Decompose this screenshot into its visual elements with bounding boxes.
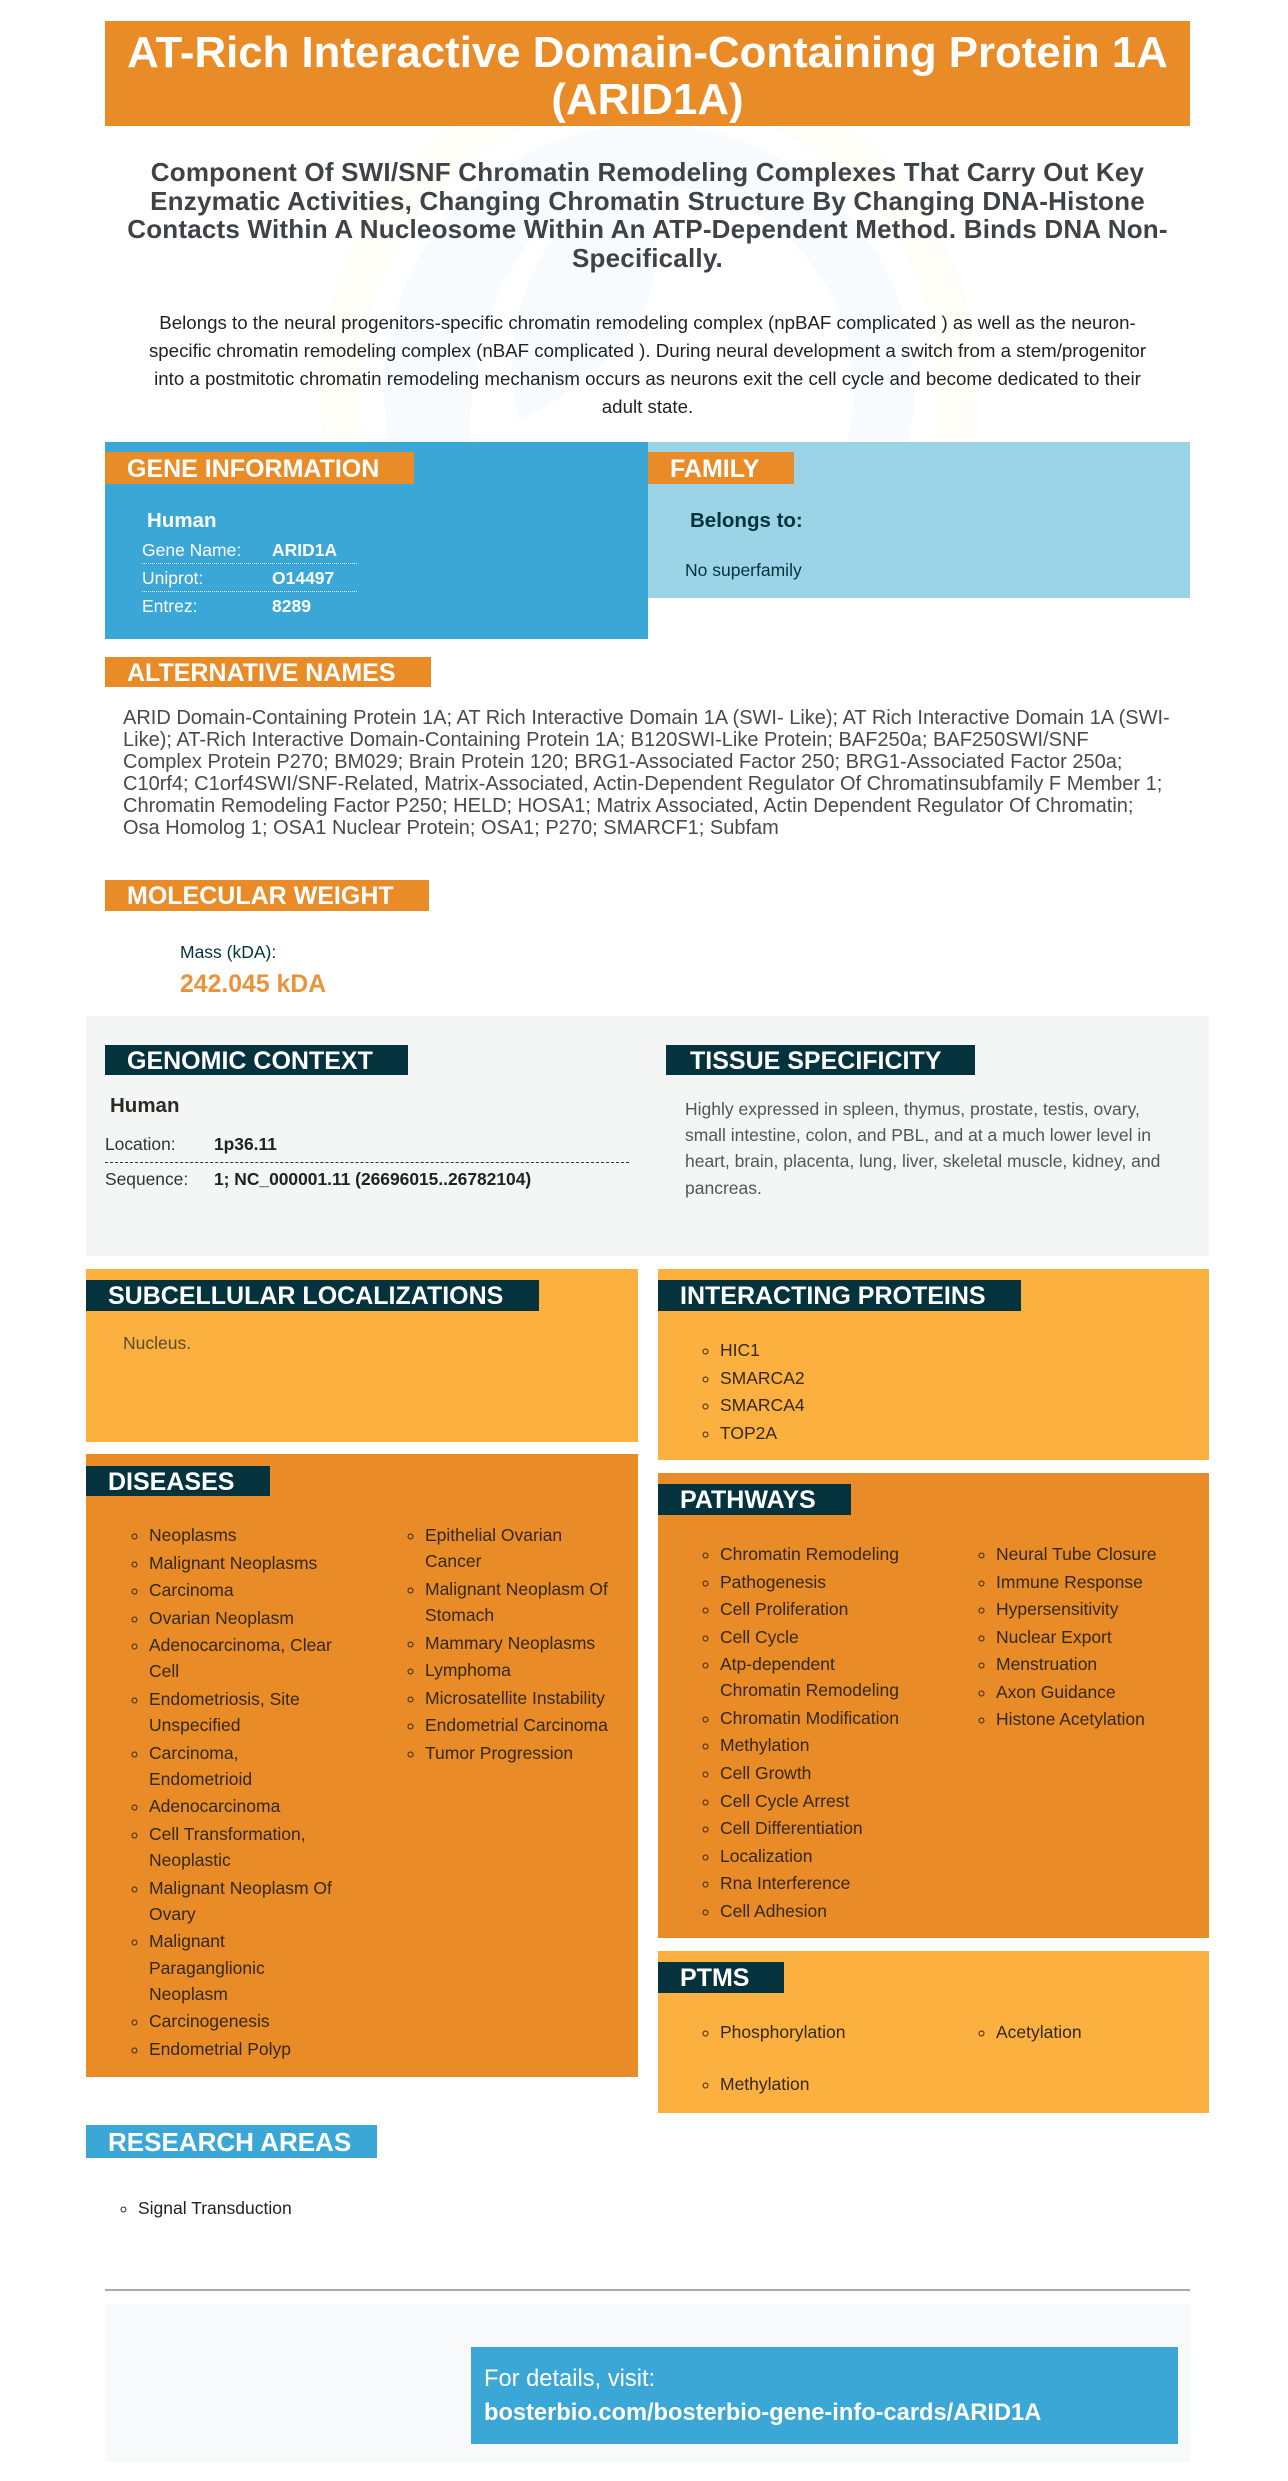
- list: diseases column 1: Adenocarcinoma, Clear: [149, 1635, 332, 1655]
- list: pathways column 2: Neural Tube Closure: [996, 1544, 1156, 1564]
- tissue specificity text: heart, brain, placenta, lung, liver, skeletal muscle, kidney, and: [685, 1151, 1160, 1171]
- heading: diseases: DISEASES: [108, 1468, 234, 1496]
- list: diseases column 1: Endometrioid: [149, 1769, 252, 1789]
- heading: alternative names: ALTERNATIVE NAMES: [127, 659, 396, 687]
- list: diseases column 1: Adenocarcinoma: [149, 1796, 280, 1816]
- list: pathways column 2: Axon Guidance: [996, 1682, 1116, 1702]
- list: diseases column 1: Malignant Neoplasm Of: [149, 1878, 332, 1898]
- alternative names text: ARID Domain-Containing Protein 1A; AT Rich Interactive Domain 1A (SWI- Like); AT Rich Interactive Domain 1A (SWI-: [123, 706, 1170, 728]
- list: diseases column 2: Malignant Neoplasm Of: [425, 1579, 608, 1599]
- title banner: AT-Rich Interactive Domain-Containing Protein 1A: [127, 28, 1168, 77]
- list: diseases column 2: Mammary Neoplasms: [425, 1632, 595, 1652]
- alternative names text: Complex Protein P270; BM029; Brain Protein 120; BRG1-Associated Factor 250; BRG1-Associated Factor 250a;: [123, 750, 1122, 772]
- list: pathways column 1: [702, 1544, 899, 1921]
- panel: pathways: [658, 1473, 1209, 1938]
- alternative names text: Like); AT-Rich Interactive Domain-Containing Protein 1A; B120SWI-Like Protein; BAF250a; BAF250SWI/SNF: [123, 728, 1089, 750]
- subtitle: Contacts Within A Nucleosome Within An ATP-Dependent Method. Binds DNA Non-: [127, 214, 1168, 244]
- list: diseases column 1: Paraganglionic: [149, 1958, 265, 1978]
- gene identifiers table: Entrez:: [142, 596, 197, 616]
- tissue specificity text: small intestine, colon, and PBL, and at a much lower level in: [685, 1125, 1151, 1145]
- gene identifiers table: Gene Name:: [142, 540, 241, 560]
- description paragraph: specific chromatin remodeling complex (nBAF complicated ). During neural development a switch from a stem/progenitor: [149, 340, 1146, 361]
- tissue specificity text: [685, 1099, 1160, 1198]
- superfamily value: No superfamily: [685, 560, 802, 580]
- list: diseases column 1: Endometriosis, Site: [149, 1689, 300, 1709]
- list: pathways column 2: Immune Response: [996, 1572, 1143, 1592]
- description paragraph: adult state.: [602, 396, 693, 417]
- subtitle: Enzymatic Activities, Changing Chromatin Structure By Changing DNA-Histone: [150, 186, 1145, 216]
- sequence row: 1; NC_000001.11 (26696015..26782104): [214, 1169, 531, 1189]
- subtitle: Component Of SWI/SNF Chromatin Remodeling Complexes That Carry Out Key: [151, 157, 1144, 187]
- heading: PTMs: PTMS: [680, 1964, 749, 1992]
- species label: Human: [110, 1094, 179, 1117]
- list: pathways column 1: Cell Cycle: [720, 1627, 799, 1647]
- list: pathways column 1: Pathogenesis: [720, 1572, 826, 1592]
- panel: interacting proteins: [658, 1269, 1209, 1460]
- location row: 1p36.11: [214, 1134, 277, 1154]
- callout url: bosterbio.com/bosterbio-gene-info-cards/ARID1A: [484, 2400, 1041, 2426]
- heading: genomic context: GENOMIC CONTEXT: [127, 1047, 373, 1075]
- list: pathways column 1: Chromatin Remodeling: [720, 1680, 899, 1700]
- list: PTMs column 1 top: Phosphorylation: [720, 2022, 846, 2042]
- list: pathways column 1: Chromatin Modification: [720, 1708, 899, 1728]
- list: diseases column 1: Unspecified: [149, 1715, 240, 1735]
- heading: gene information: GENE INFORMATION: [127, 455, 379, 483]
- list: pathways column 1: Cell Cycle Arrest: [720, 1791, 849, 1811]
- sequence row: Sequence:: [105, 1169, 188, 1189]
- list: pathways column 1: Methylation: [720, 1735, 810, 1755]
- list: pathways column 2: Histone Acetylation: [996, 1709, 1145, 1729]
- heading: research areas: RESEARCH AREAS: [108, 2127, 351, 2157]
- description paragraph: [149, 312, 1146, 417]
- list: pathways column 1: Chromatin Remodeling: [720, 1544, 899, 1564]
- alternative names text: Chromatin Remodeling Factor P250; HELD; HOSA1; Matrix Associated, Actin Dependent Regulator Of Chromatin;: [123, 794, 1133, 816]
- list: pathways column 2: Menstruation: [996, 1654, 1097, 1674]
- list: diseases column 2: [408, 1525, 608, 1763]
- list: diseases column 1: Ovarian Neoplasm: [149, 1608, 294, 1628]
- list: pathways column 1: Atp-dependent: [720, 1654, 835, 1674]
- list: diseases column 2: Stomach: [425, 1605, 494, 1625]
- list: pathways column 1: Localization: [720, 1846, 812, 1866]
- mass value: 242.045 kDA: [180, 971, 326, 998]
- panel: family: [648, 442, 1190, 598]
- list: pathways column 2: [978, 1544, 1156, 1729]
- list: diseases column 1: Malignant Neoplasms: [149, 1553, 317, 1573]
- list: interacting proteins: SMARCA4: [720, 1395, 805, 1415]
- description paragraph: into a postmitotic chromatin remodeling mechanism occurs as neurons exit the cell cycle and become dedicated to their: [154, 368, 1141, 389]
- panel: gene information: [105, 442, 648, 639]
- list: diseases column 1: Endometrial Polyp: [149, 2039, 291, 2059]
- tissue specificity text: pancreas.: [685, 1178, 762, 1198]
- list: diseases column 2: Epithelial Ovarian: [425, 1525, 562, 1545]
- list: diseases column 1: Neoplastic: [149, 1850, 231, 1870]
- panel: genomic context and tissue specificity: [86, 1016, 1209, 1256]
- alternative names text: C10rf4; C1orf4SWI/SNF-Related, Matrix-Associated, Actin-Dependent Regulator Of Chromatinsubfamily F Member 1;: [123, 772, 1162, 794]
- gene identifiers table: ARID1A: [272, 540, 337, 560]
- mass label: Mass (kDA):: [180, 942, 276, 962]
- callout: details link: [471, 2347, 1178, 2444]
- panel: footer: [105, 2304, 1190, 2462]
- list: pathways column 2: Hypersensitivity: [996, 1599, 1119, 1619]
- callout label: For details, visit:: [484, 2366, 655, 2392]
- list: diseases column 2: Endometrial Carcinoma: [425, 1715, 608, 1735]
- list: diseases column 1: Malignant: [149, 1931, 225, 1951]
- list: diseases column 1: Carcinogenesis: [149, 2011, 270, 2031]
- localization text: Nucleus.: [123, 1333, 191, 1353]
- heading: tissue specificity: TISSUE SPECIFICITY: [690, 1047, 941, 1075]
- list: diseases column 1: Cell: [149, 1661, 179, 1681]
- list: diseases column 2: Cancer: [425, 1551, 481, 1571]
- alternative names text: Osa Homolog 1; OSA1 Nuclear Protein; OSA1; P270; SMARCF1; Subfam: [123, 816, 779, 838]
- subtitle: Specifically.: [572, 243, 723, 273]
- list: pathways column 1: Cell Proliferation: [720, 1599, 848, 1619]
- list: interacting proteins: HIC1: [720, 1340, 760, 1360]
- heading: molecular weight: MOLECULAR WEIGHT: [127, 882, 394, 910]
- tissue specificity text: Highly expressed in spleen, thymus, prostate, testis, ovary,: [685, 1099, 1140, 1119]
- gene identifiers table: O14497: [272, 568, 334, 588]
- list: diseases column 2: Microsatellite Instability: [425, 1688, 605, 1708]
- heading: pathways: [658, 1484, 851, 1515]
- species label: Human: [147, 509, 216, 532]
- heading: pathways: PATHWAYS: [680, 1486, 816, 1514]
- list: diseases column 1: Carcinoma,: [149, 1743, 238, 1763]
- panel: diseases: [86, 1454, 638, 2077]
- description paragraph: Belongs to the neural progenitors-specific chromatin remodeling complex (npBAF complicated ) as well as the neuron-: [159, 312, 1136, 333]
- list: interacting proteins: TOP2A: [720, 1423, 777, 1443]
- heading: diseases: [86, 1466, 270, 1496]
- panel: PTMs: [658, 1951, 1209, 2113]
- gene identifiers table: 8289: [272, 596, 311, 616]
- list: interacting proteins: [702, 1340, 805, 1443]
- list: pathways column 1: Cell Growth: [720, 1763, 811, 1783]
- list: pathways column 2: Nuclear Export: [996, 1627, 1112, 1647]
- list: diseases column 1: [132, 1525, 332, 2059]
- heading: family: [648, 452, 794, 484]
- list: diseases column 2: Tumor Progression: [425, 1743, 573, 1763]
- alternative names text: [123, 706, 1170, 838]
- gene identifiers table: [142, 540, 357, 616]
- belongs to label: Belongs to:: [690, 509, 803, 532]
- gene identifiers table: Uniprot:: [142, 568, 203, 588]
- list: diseases column 1: Neoplasms: [149, 1525, 237, 1545]
- list: research areas: Signal Transduction: [138, 2198, 292, 2218]
- list: PTMs column 1 bottom: Methylation: [720, 2074, 810, 2094]
- list: PTMs column 2: Acetylation: [996, 2022, 1082, 2042]
- list: diseases column 1: Neoplasm: [149, 1984, 228, 2004]
- title banner: (ARID1A): [551, 75, 744, 124]
- location row: [105, 1129, 629, 1163]
- list: diseases column 1: Carcinoma: [149, 1580, 234, 1600]
- subtitle: [127, 157, 1168, 273]
- list: pathways column 1: Cell Differentiation: [720, 1818, 863, 1838]
- location row: Location:: [105, 1134, 176, 1154]
- heading: interacting proteins: INTERACTING PROTEINS: [680, 1282, 986, 1310]
- list: diseases column 2: Lymphoma: [425, 1660, 511, 1680]
- heading: PTMs: [658, 1962, 784, 1993]
- list: interacting proteins: SMARCA2: [720, 1368, 805, 1388]
- list: pathways column 1: Cell Adhesion: [720, 1901, 827, 1921]
- title banner: [105, 21, 1190, 126]
- list: diseases column 1: Cell Transformation,: [149, 1824, 306, 1844]
- list: pathways column 1: Rna Interference: [720, 1873, 850, 1893]
- heading: subcellular localizations: SUBCELLULAR LOCALIZATIONS: [108, 1282, 503, 1310]
- panel: subcellular localizations: [86, 1269, 638, 1442]
- heading: family: FAMILY: [670, 455, 759, 483]
- watermark logo background: [410, 166, 606, 432]
- list: diseases column 1: Ovary: [149, 1904, 196, 1924]
